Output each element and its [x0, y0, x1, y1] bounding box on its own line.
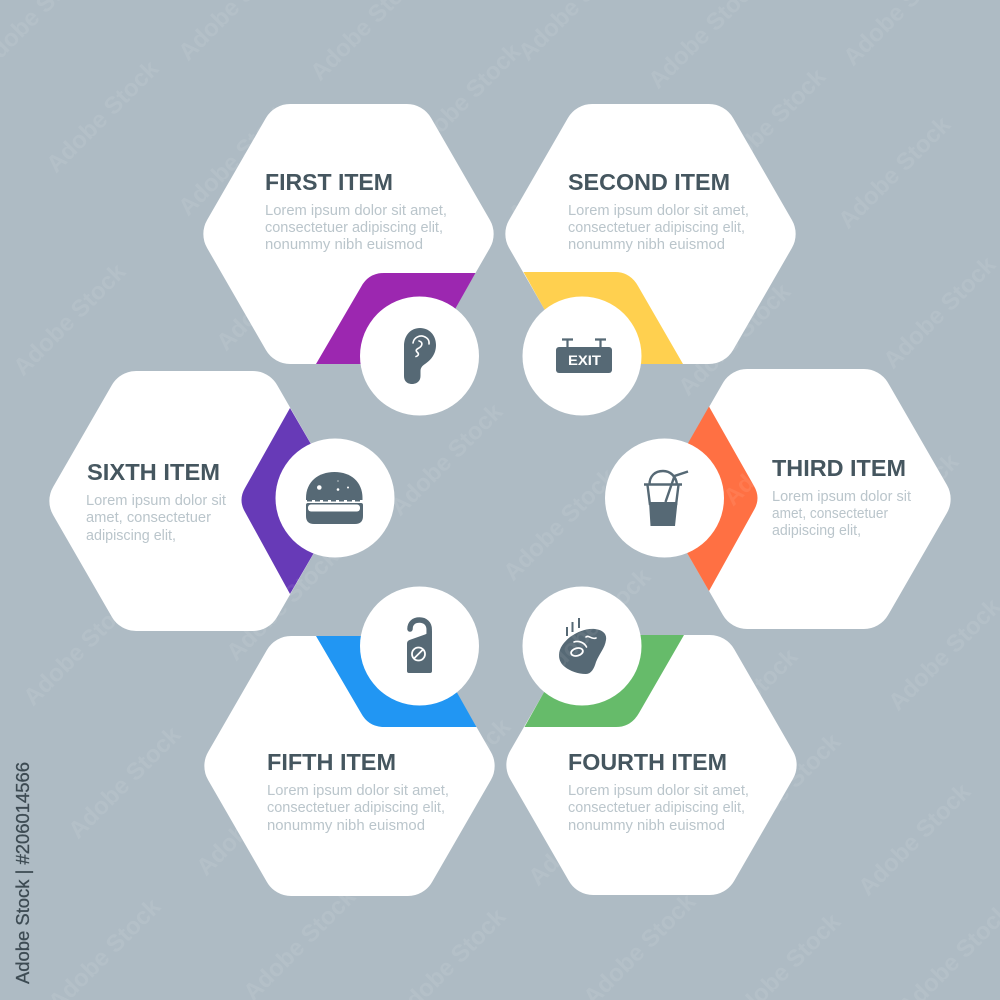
text block: fourth item: nonummy nibh euismod	[568, 818, 725, 834]
text block: fourth item: consectetuer adipiscing elit,	[568, 800, 745, 816]
icon circle: third	[605, 438, 724, 558]
panel: sixth item	[49, 371, 395, 631]
text block: sixth item: adipiscing elit,	[86, 528, 176, 544]
credit: stock id: Adobe Stock | #206014566	[13, 762, 33, 984]
band: deep purple	[242, 408, 344, 594]
icon circle: sixth	[276, 438, 394, 558]
watermark: repeated stock marks: Adobe Stock	[833, 111, 957, 234]
watermark: repeated stock marks: Adobe Stock	[853, 778, 977, 901]
watermark: repeated stock marks: Adobe Stock	[58, 378, 182, 501]
text block: fourth item	[568, 783, 749, 834]
watermark: repeated stock marks: Adobe Stock	[680, 643, 804, 766]
watermark: repeated stock marks: Adobe Stock	[41, 55, 165, 178]
band: blue	[316, 636, 476, 727]
watermark: repeated stock marks: Adobe Stock	[18, 588, 142, 711]
text block: sixth item: amet, consectetuer	[86, 510, 211, 526]
watermark: repeated stock marks: Adobe Stock	[841, 448, 965, 571]
text block: third item: Lorem ipsum dolor sit	[772, 489, 911, 505]
watermark: repeated stock marks: Adobe Stock	[878, 251, 1000, 374]
heading: third item: THIRD ITEM	[772, 455, 906, 481]
text block: first item: nonummy nibh euismod	[265, 237, 423, 253]
band: orange	[656, 406, 758, 591]
watermark: repeated stock marks: Adobe Stock	[393, 713, 517, 836]
watermark: repeated stock marks: Adobe Stock	[403, 38, 527, 161]
icon: exit sign: EXIT	[568, 352, 601, 368]
text block: sixth item: Lorem ipsum dolor sit	[86, 493, 226, 509]
watermark: repeated stock marks: Adobe Stock	[723, 728, 847, 851]
watermark: repeated stock marks: Adobe Stock	[211, 233, 335, 356]
hexagon: second	[505, 104, 796, 364]
text block: fifth item	[267, 783, 449, 834]
icon circle: first	[360, 296, 479, 416]
heading: second item: SECOND ITEM	[568, 169, 730, 195]
icon: ear	[404, 328, 436, 384]
icon circle: second	[522, 296, 642, 416]
panel: second item	[505, 104, 796, 416]
text block: third item	[772, 489, 911, 539]
heading: sixth item: SIXTH ITEM	[87, 459, 220, 485]
icon: door hanger	[407, 620, 432, 673]
text block: fifth item: nonummy nibh euismod	[267, 818, 425, 834]
text block: first item: consectetuer adipiscing elit,	[265, 220, 443, 236]
watermark: repeated stock marks: Adobe Stock	[498, 463, 622, 586]
text block: fifth item: Lorem ipsum dolor sit amet,	[267, 783, 449, 799]
text block: third item: amet, consectetuer	[772, 506, 888, 522]
watermark: repeated stock marks: Adobe Stock	[173, 98, 297, 221]
band: yellow	[524, 272, 683, 364]
text block: second item	[568, 203, 749, 253]
icon circle: fourth	[522, 586, 642, 706]
icon: steak	[559, 618, 606, 674]
band: purple	[316, 273, 476, 364]
text block: fifth item: consectetuer adipiscing elit,	[267, 800, 445, 816]
text block: sixth item	[86, 493, 226, 544]
text block: first item	[265, 203, 447, 253]
hexagon: third	[660, 369, 951, 629]
text block: second item: consectetuer adipiscing elit,	[568, 220, 745, 236]
watermark: repeated stock marks: Adobe Stock	[503, 105, 627, 228]
heading: fifth item: FIFTH ITEM	[267, 749, 396, 775]
watermark: repeated stock marks: Adobe Stock	[708, 63, 832, 186]
icon: exit sign	[556, 340, 612, 373]
hexagon: sixth	[49, 371, 340, 631]
hexagon: fifth	[204, 636, 495, 896]
hexagon: fourth	[506, 635, 797, 895]
panel: fifth item	[204, 586, 495, 896]
watermark: repeated stock marks: Adobe Stock	[533, 563, 657, 686]
watermark: repeated stock marks: Adobe Stock	[385, 398, 509, 521]
watermark: repeated stock marks: Adobe Stock	[191, 758, 315, 881]
watermark: repeated stock marks: Adobe Stock	[523, 768, 647, 891]
heading: fourth item: FOURTH ITEM	[568, 749, 727, 775]
icon circle: fifth	[360, 586, 479, 706]
text block: fourth item: Lorem ipsum dolor sit amet,	[568, 783, 749, 799]
band: green	[524, 635, 684, 727]
hexagon: first	[203, 104, 494, 364]
watermark: repeated stock marks: Adobe Stock	[673, 278, 797, 401]
icon: drink cup	[644, 471, 688, 526]
watermark: repeated stock marks: Adobe Stock	[63, 721, 187, 844]
watermark: repeated stock marks: Adobe Stock	[718, 388, 842, 511]
watermark: repeated stock marks: Adobe Stock	[8, 258, 132, 381]
text block: second item: Lorem ipsum dolor sit amet,	[568, 203, 749, 219]
panel: third item	[605, 369, 951, 629]
heading: first item: FIRST ITEM	[265, 169, 393, 195]
panel: fourth item	[506, 586, 797, 895]
watermark: repeated stock marks: Adobe Stock	[221, 543, 345, 666]
text block: first item: Lorem ipsum dolor sit amet,	[265, 203, 447, 219]
text block: second item: nonummy nibh euismod	[568, 237, 725, 253]
icon: burger	[306, 472, 363, 524]
panel: first item	[203, 104, 494, 416]
text block: third item: adipiscing elit,	[772, 523, 861, 539]
